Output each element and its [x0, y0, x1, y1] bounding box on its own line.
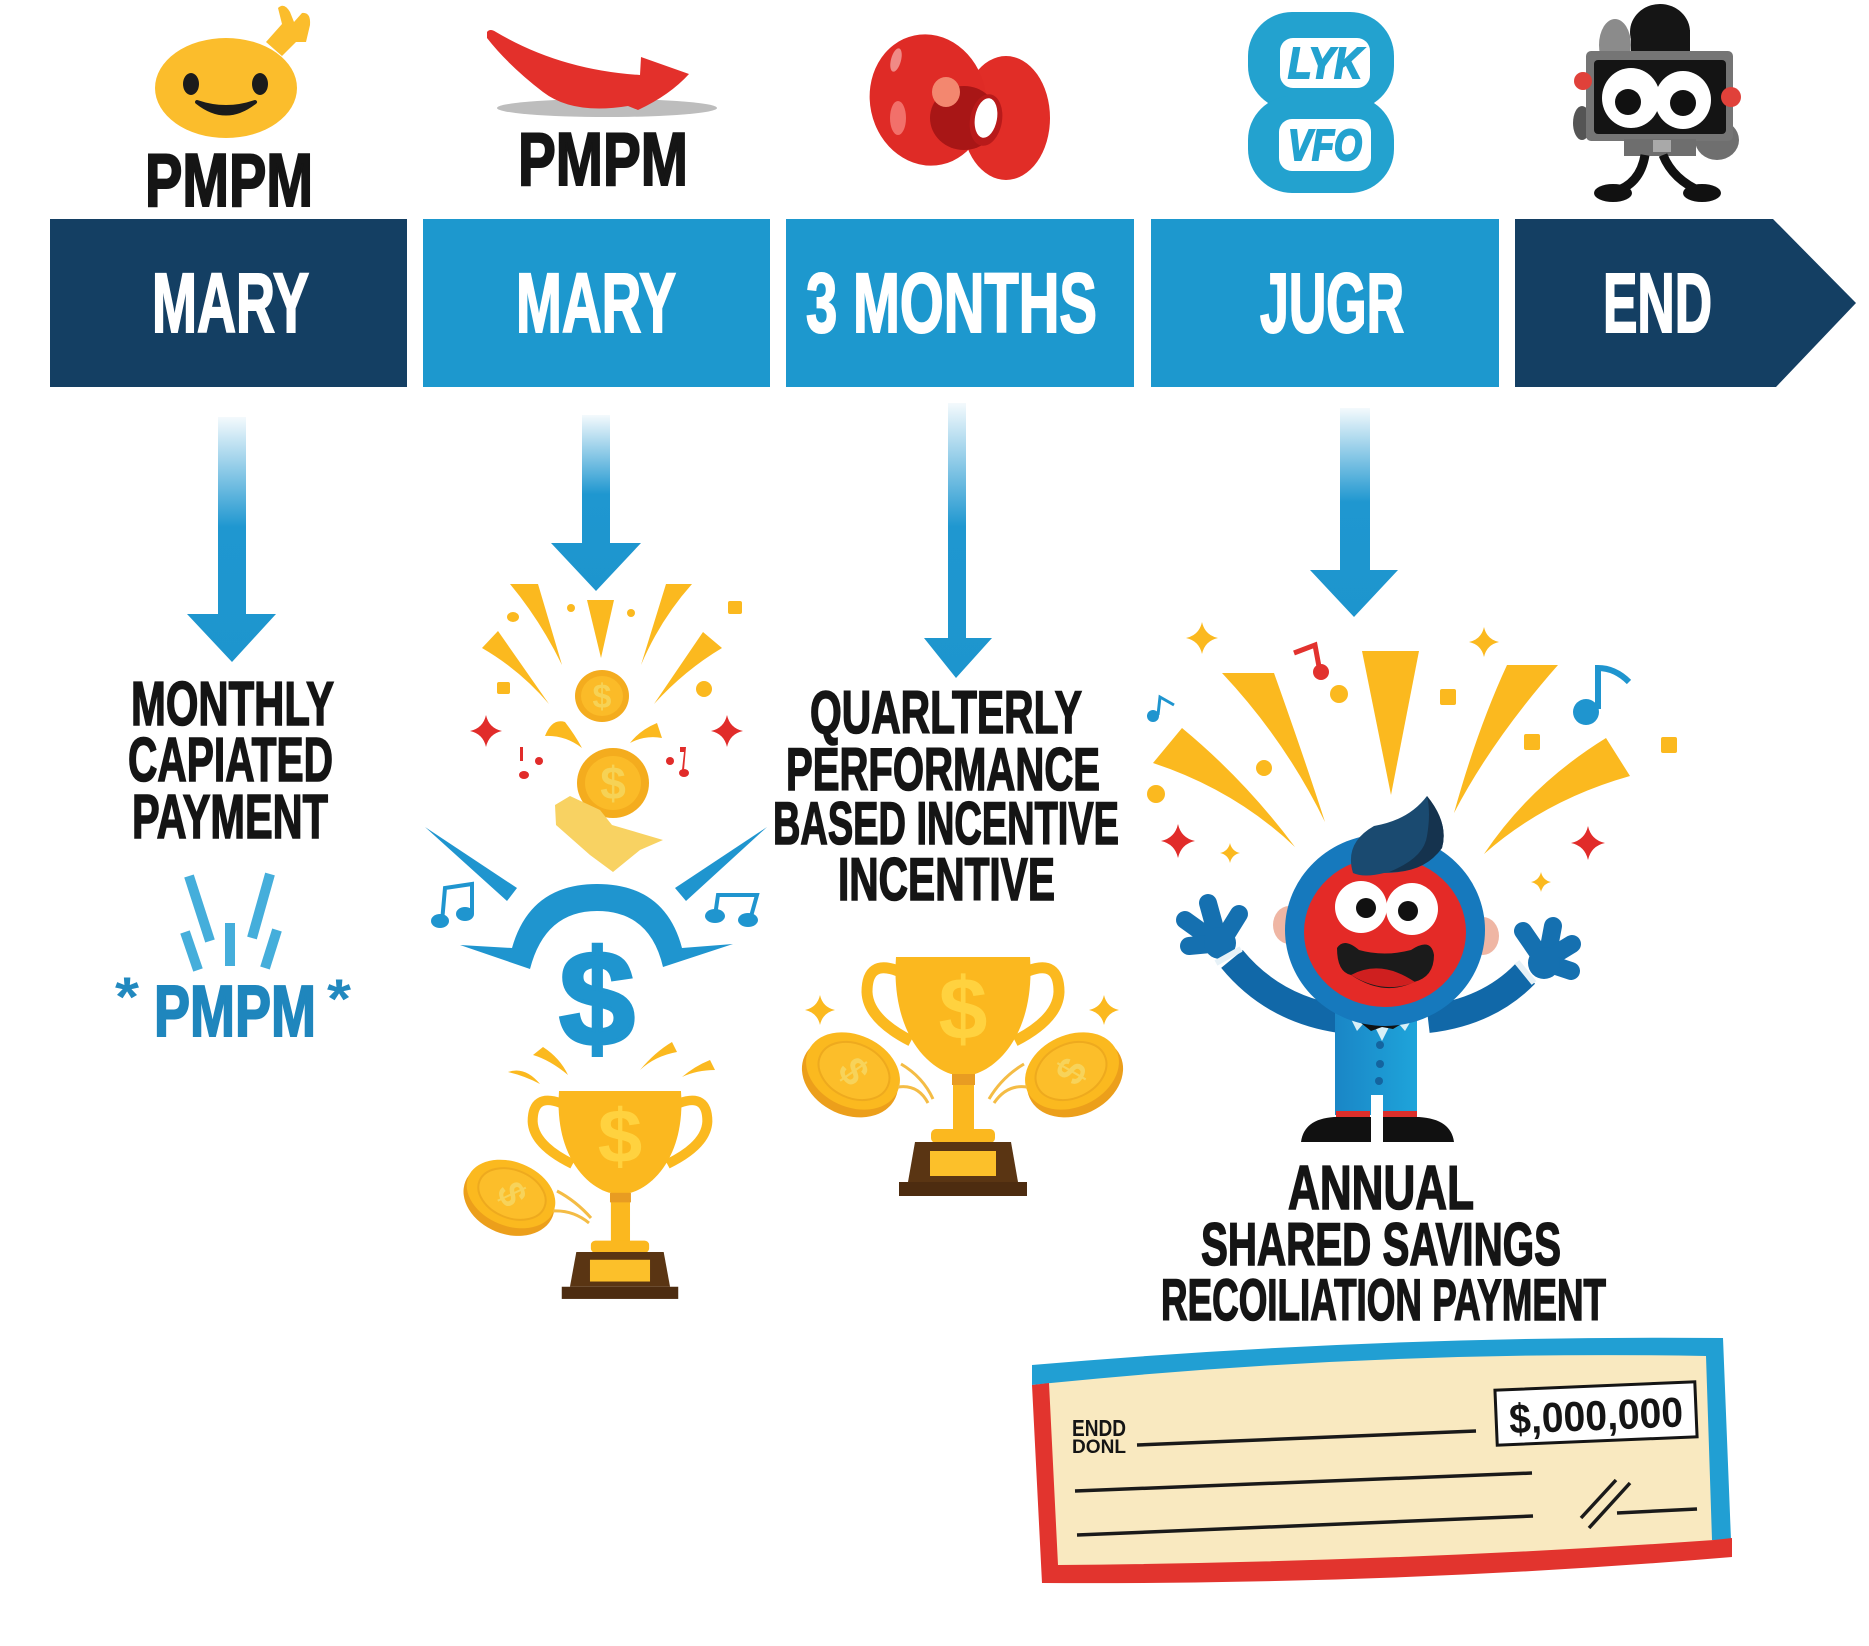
left coin [789, 1018, 933, 1133]
text: quarterly performance based incentive: QUARLTERLY [810, 679, 1082, 746]
text: annual shared savings reconciliation payment: SHARED SAVINGS [1201, 1211, 1561, 1278]
illustration: cheque [1032, 1338, 1732, 1583]
coin: top [575, 670, 629, 722]
segment: JUGR: JUGR [1260, 256, 1404, 350]
trophy [867, 957, 1059, 1196]
blue music notes [442, 884, 757, 922]
segment: END arrowhead: END [1603, 256, 1712, 350]
body [1301, 1007, 1454, 1142]
coin: middle: $ [600, 757, 626, 809]
segment: MARY dark: MARY [152, 256, 309, 350]
right coin: $ [1047, 1051, 1096, 1092]
illustration: celebrating mascot [1147, 622, 1677, 1142]
cuffs [1216, 949, 1534, 983]
icon: blue burst with PMPM [115, 874, 351, 1052]
text: annual shared savings reconciliation payment: RECOILIATION PAYMENT [1161, 1268, 1606, 1333]
text: quarterly performance based incentive: PERFORMANCE [786, 736, 1100, 803]
ears [1273, 906, 1499, 955]
text: monthly capitated payment: PAYMENT [132, 783, 328, 852]
flying coin [452, 1147, 591, 1249]
segment: MARY blue [423, 219, 770, 387]
coin: top: $ [593, 678, 612, 716]
label: PMPM second: PMPM [518, 117, 688, 201]
text: annual shared savings reconciliation payment: ANNUAL [1288, 1154, 1474, 1223]
icon: blue burst with PMPM: * [327, 967, 351, 1030]
text: annual shared savings reconciliation payment [1161, 1154, 1606, 1333]
icon: camera robot [1573, 4, 1741, 202]
head [1285, 834, 1485, 1026]
left coin: $ [829, 1050, 878, 1093]
icon: blue figure-eight badge: VFO [1288, 121, 1362, 170]
yellow burst spikes [482, 584, 742, 748]
hand holding coin [555, 796, 663, 872]
arrow: column 1 [187, 417, 276, 662]
timeline bar [50, 219, 1856, 387]
trophy with coin [533, 1091, 707, 1299]
arms [1232, 959, 1525, 1019]
right coin [989, 1018, 1136, 1133]
text: quarterly performance based incentive: BASED INCENTIVE [773, 790, 1119, 857]
burst spikes [1147, 622, 1677, 892]
arrow: column 4 [1310, 408, 1398, 617]
icon: blue figure-eight badge [1248, 12, 1394, 193]
payee label [1072, 1415, 1126, 1458]
hair [1351, 796, 1444, 876]
trophy with coin: $ [598, 1093, 642, 1179]
cheque lines [1075, 1431, 1697, 1535]
arrow: column 2 [551, 415, 641, 591]
segment: JUGR [1151, 219, 1499, 387]
icon: yellow smiley with topknot [155, 6, 310, 138]
illustration: column 2 celebration [425, 584, 767, 1299]
text: monthly capitated payment: CAPIATED [128, 726, 333, 795]
segment: MARY blue: MARY [516, 256, 676, 350]
red sparkles and notes [470, 715, 743, 779]
text: quarterly performance based incentive: INCENTIVE [838, 846, 1055, 913]
text: quarterly performance based incentive [773, 679, 1119, 913]
icon: red glossy knot [858, 23, 1050, 180]
music notes [1147, 645, 1629, 725]
payee label: DONL [1072, 1437, 1126, 1458]
flying coin: $ [488, 1176, 535, 1213]
segment: END arrowhead [1515, 219, 1856, 387]
label: PMPM left: PMPM [145, 138, 313, 222]
segment: 3 MONTHS [786, 219, 1134, 387]
gloves [1185, 903, 1572, 979]
coin: middle [577, 748, 649, 818]
text: monthly capitated payment [128, 670, 334, 852]
blue spikes and arch [425, 827, 767, 1074]
icon: blue burst with PMPM: * [115, 965, 139, 1028]
icon: blue burst with PMPM: PMPM [154, 972, 316, 1052]
text: monthly capitated payment: MONTHLY [131, 670, 334, 739]
amount box: $,000,000 [1508, 1388, 1684, 1443]
arrow: column 3 [924, 403, 992, 678]
cheque paper [1040, 1349, 1720, 1575]
payee label: ENDD [1072, 1415, 1126, 1441]
trophy: $ [939, 959, 987, 1058]
small yellow arcs [508, 1042, 715, 1084]
icon: red swoosh arrow with shadow [487, 30, 717, 117]
icon: blue figure-eight badge: LYK [1288, 39, 1365, 88]
illustration: trophy with two coins [789, 957, 1136, 1196]
blue spikes and arch: $ [559, 923, 635, 1074]
gold sparkles [805, 995, 1119, 1025]
segment: MARY dark [50, 219, 407, 387]
red sparkles [1161, 824, 1605, 860]
blue border [1032, 1338, 1731, 1540]
segment: 3 MONTHS: 3 MONTHS [806, 256, 1097, 350]
red border [1032, 1383, 1732, 1583]
